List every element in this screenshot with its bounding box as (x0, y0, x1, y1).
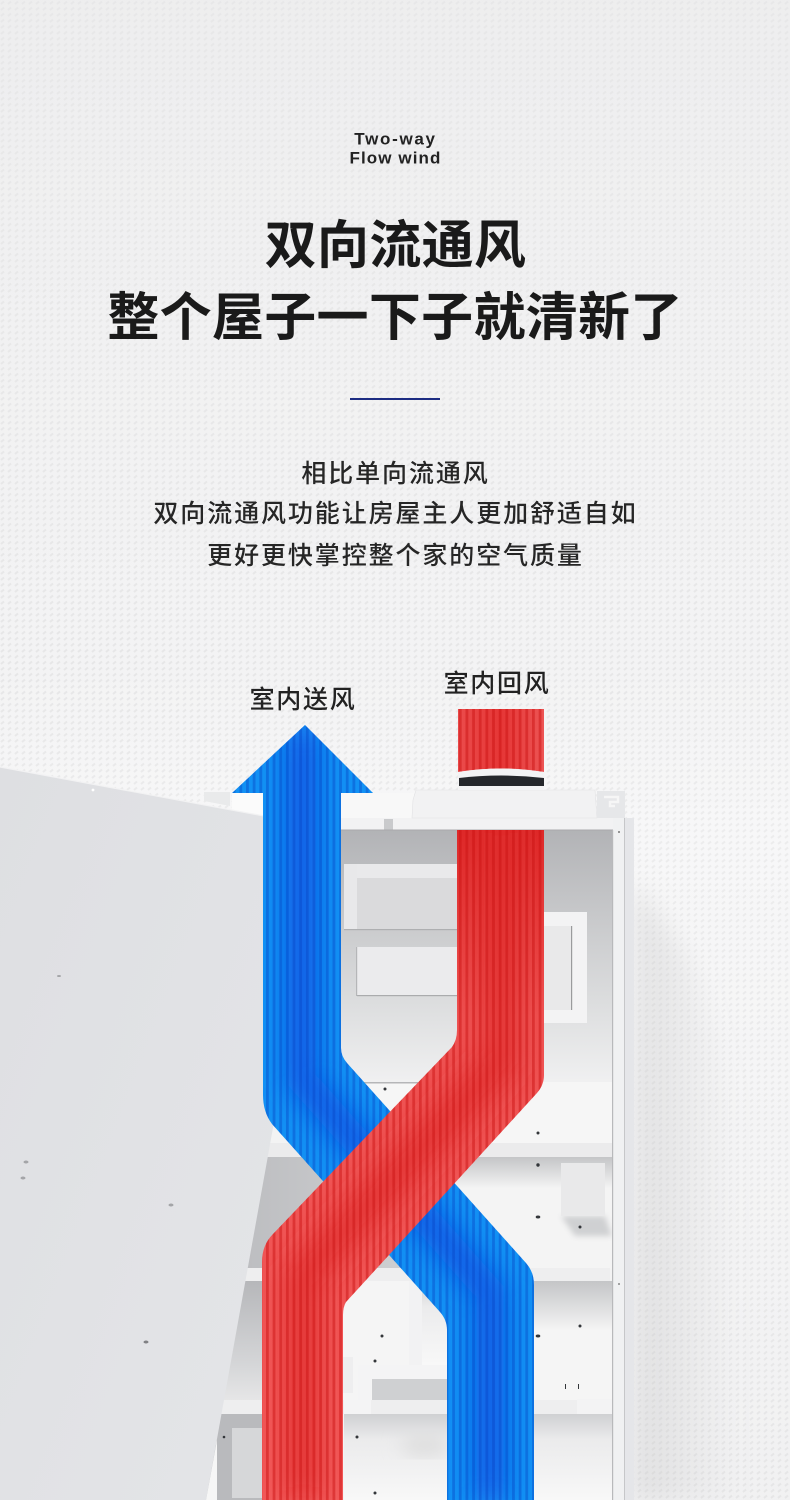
inner panel (356, 947, 457, 996)
small block (343, 1357, 353, 1393)
screw holes (223, 831, 620, 1494)
bracket slot right (604, 797, 618, 806)
heading: two-way flow wind (349, 130, 442, 168)
white gaps beside arrow stem (232, 793, 414, 818)
inner bracket upper left (344, 864, 457, 930)
divider rule (350, 398, 440, 400)
top flange (412, 790, 597, 818)
red return air arrow (255, 820, 550, 1500)
mounting bracket right (597, 791, 625, 818)
lower right shelf step (577, 1399, 613, 1414)
title: 双向流通风 (265, 218, 526, 276)
body text: 相比单向流通风 (301, 460, 490, 488)
front door panel (0, 767, 278, 1500)
mounting bracket left (204, 792, 230, 806)
side frame (612, 818, 634, 1500)
lower vertical bar (409, 1281, 422, 1368)
top rail (341, 818, 613, 830)
ventilation unit cabinet (0, 767, 634, 1500)
heading: two-way flow wind: Flow wind (349, 148, 442, 168)
title: 整个屋子一下子就清新了 (107, 290, 683, 348)
body text (153, 460, 638, 570)
stepped shelf (344, 1365, 447, 1414)
body text: 更好更快掌控整个家的空气质量 (207, 542, 584, 570)
blue supply air arrow (225, 720, 540, 1500)
lower left panel (232, 1428, 264, 1498)
small box (561, 1163, 605, 1216)
label: indoor supply air: 室内送风 (250, 686, 356, 714)
label: indoor return air: 室内回风 (444, 670, 550, 698)
inner white frame (544, 912, 587, 1023)
cabinet interior (200, 830, 613, 1500)
duct collar (458, 768, 544, 790)
body text: 双向流通风功能让房屋主人更加舒适自如 (153, 500, 638, 528)
wall shadow (634, 880, 735, 1500)
heading: two-way flow wind: Two-way (354, 130, 437, 148)
red return air duct top section (458, 709, 544, 772)
title (107, 218, 683, 348)
